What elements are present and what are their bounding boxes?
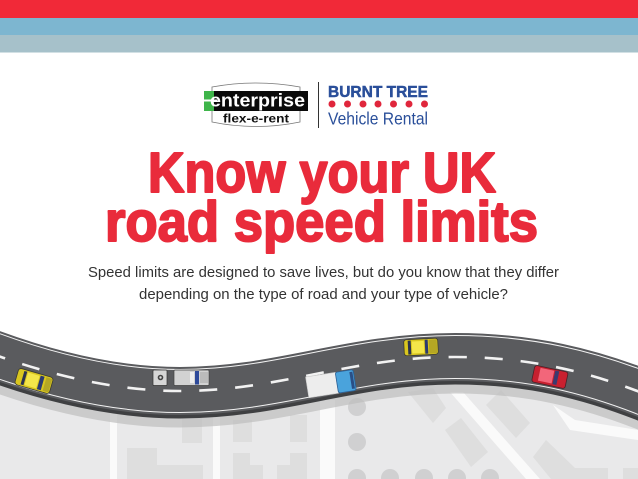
title [105,141,538,254]
logo: Burnt Tree Vehicle Rental [328,84,428,128]
subtitle: depending on the type of road and your type of vehicle? [139,287,508,303]
car: red [532,365,568,389]
car: yellow right [404,338,438,356]
subtitle [88,265,559,303]
logo: enterprise flex-e-rent [204,83,308,126]
logo: enterprise flex-e-rent: enterprise [210,90,305,110]
car: yellow left [14,368,54,394]
logo: enterprise flex-e-rent: flex-e-rent [223,114,289,126]
subtitle: Speed limits are designed to save lives, but do you know that they differ [88,265,559,281]
logo divider [318,82,319,128]
truck: white with blue cab [306,370,356,398]
truck: grey [153,370,209,386]
road [0,353,638,408]
title: Know your UK [148,141,496,205]
header stripes [0,0,638,52]
logo: Burnt Tree Vehicle Rental: Vehicle Rental [328,108,428,128]
street map background [0,353,638,479]
title: road speed limits [105,190,538,254]
logo: Burnt Tree Vehicle Rental: BURNT TREE [328,84,428,101]
